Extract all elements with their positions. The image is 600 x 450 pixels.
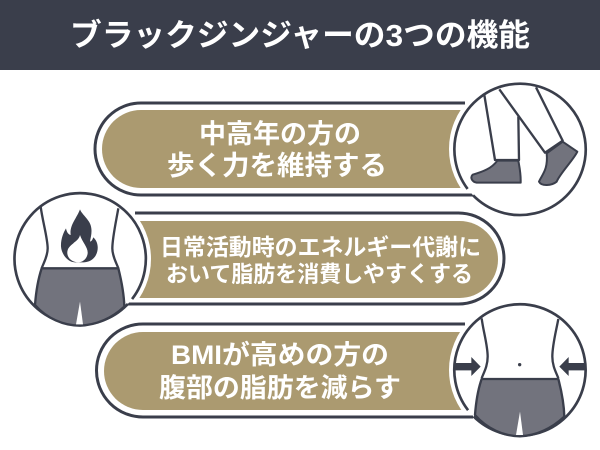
- icon: flame: [61, 209, 98, 262]
- icon: waist with arrows: [454, 304, 586, 436]
- title banner: [0, 0, 600, 70]
- panel: BMI abdominal fat function: [96, 299, 591, 441]
- label pill: metabolism: 日常活動時のエネルギー代謝に: [160, 234, 481, 260]
- label pill: walking: 歩く力を維持する: [167, 151, 387, 181]
- icon: waist with flame: [14, 193, 146, 326]
- label pill: metabolism: [9, 188, 504, 330]
- label pill: walking: 中高年の方の: [199, 119, 361, 149]
- icon: walking legs: [454, 84, 586, 215]
- label pill: walking: [95, 78, 591, 220]
- label pill: metabolism: おいて脂肪を消費しやすくする: [166, 262, 473, 287]
- label pill: abdominal fat: [96, 299, 591, 441]
- icon: left arrow pointing in: [455, 357, 481, 376]
- label pill: abdominal fat: 腹部の脂肪を減らす: [159, 373, 401, 403]
- icon: right arrow pointing in: [559, 357, 585, 376]
- label pill: abdominal fat: BMIが高めの方の: [171, 340, 389, 370]
- panel: walking function: [95, 78, 591, 220]
- title banner: ブラックジンジャーの3つの機能: [70, 18, 530, 53]
- icon: navel: [518, 363, 521, 366]
- panel: energy metabolism function: [9, 188, 504, 330]
